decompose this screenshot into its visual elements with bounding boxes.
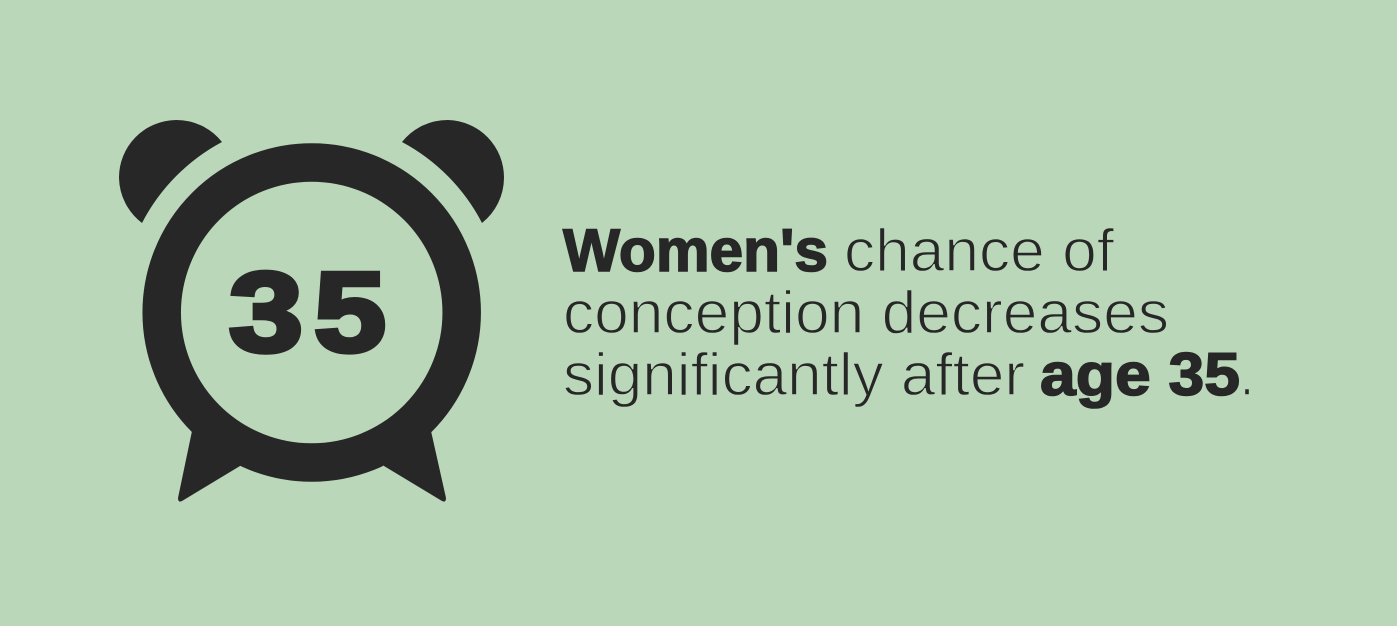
line 1: Women's [563, 217, 828, 284]
line 3: significantly after [563, 341, 1025, 408]
clock number 35: 5 [314, 249, 386, 375]
line 3: age 35 [1040, 341, 1240, 408]
clock ring [162, 162, 462, 462]
clock left bell [119, 120, 222, 223]
clock right foot [362, 431, 446, 502]
clock number 35 [229, 249, 386, 375]
statement text [563, 217, 1254, 408]
clock right bell [402, 120, 504, 223]
line 3: . [1240, 341, 1254, 408]
line 3 [563, 341, 1254, 408]
line 1: chance of [844, 217, 1114, 284]
clock left foot [178, 431, 262, 502]
line 2: conception decreases [563, 279, 1169, 346]
icon: alarm clock [119, 120, 504, 502]
clock number 35: 3 [229, 249, 303, 375]
line 1 [563, 217, 1114, 284]
